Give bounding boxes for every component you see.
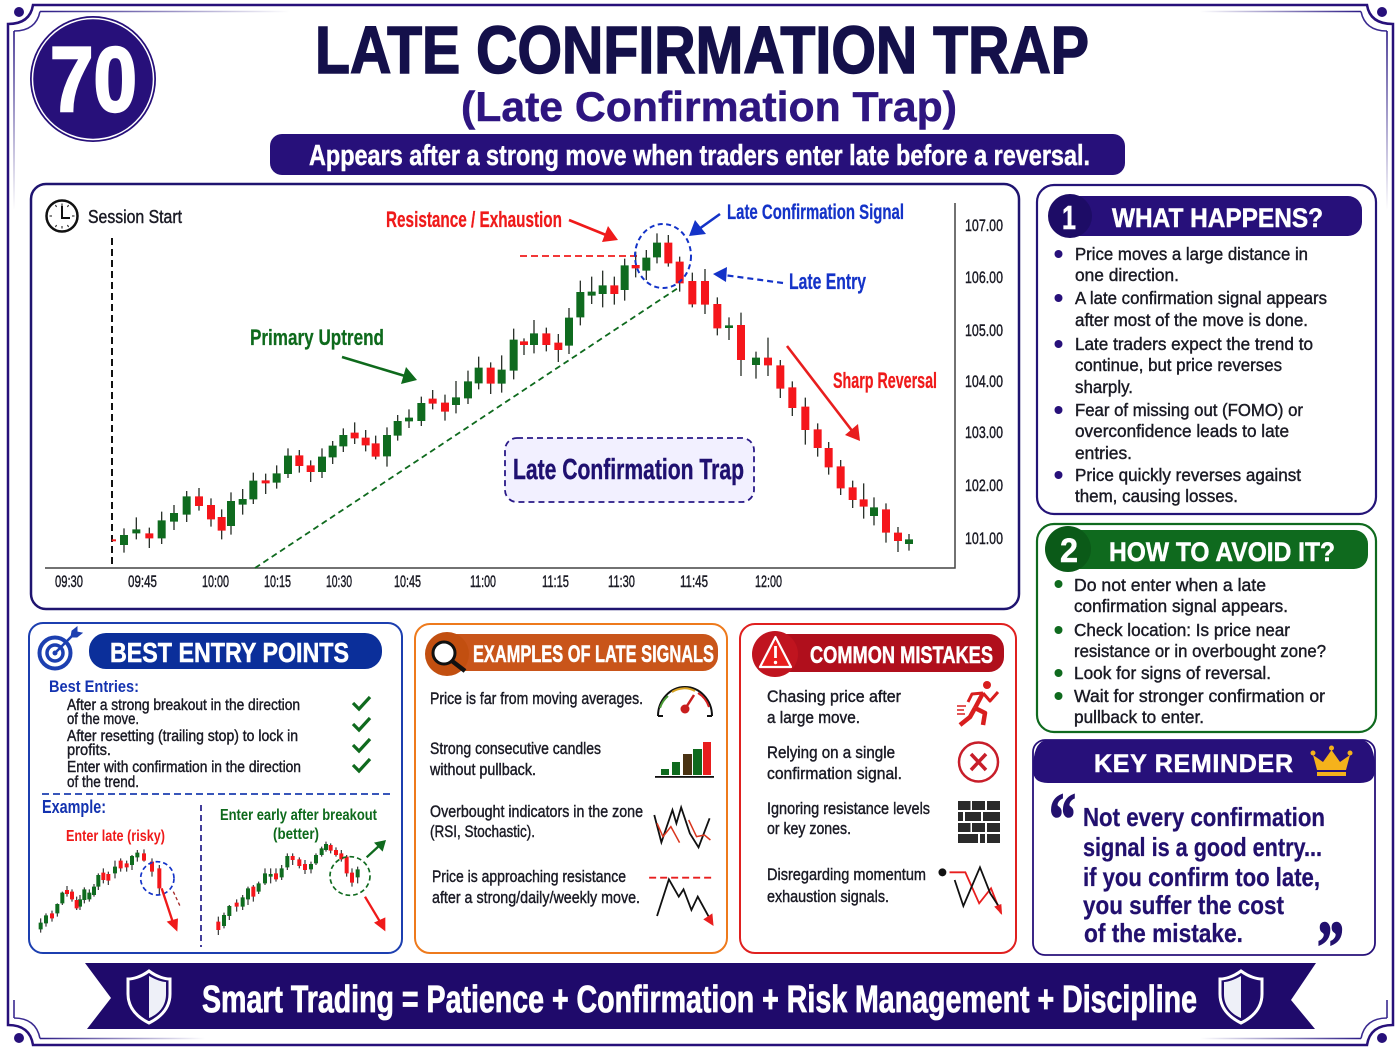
text: momentum exhaustion: [767, 865, 926, 906]
bullets: what happens: one direction.: [1075, 265, 1179, 285]
divider: [42, 793, 390, 795]
bullets: what happens: Price quickly reverses against: [1075, 465, 1301, 485]
bullets: how to avoid it: pullback to enter.: [1074, 707, 1204, 727]
arrow: sharp reversal: [787, 346, 860, 441]
label: sharp reversal: Sharp Reversal: [833, 368, 937, 393]
best entries list: [67, 697, 301, 791]
candles: top and reversal leg: [514, 233, 909, 552]
uptrend support line: [255, 288, 678, 568]
icon: momentum exhaustion chart: [938, 867, 1002, 915]
price axis labels: 103.00: [965, 423, 1003, 442]
price axis labels: 107.00: [965, 216, 1003, 235]
heading: how to avoid it: [1045, 526, 1368, 572]
text: consecutive candles: without pullback.: [429, 760, 536, 779]
time axis labels: 09:45: [128, 573, 157, 591]
price axis labels: 105.00: [965, 321, 1003, 340]
icon: target: [40, 627, 82, 668]
tagline banner: [270, 134, 1125, 175]
text: momentum exhaustion: exhaustion signals.: [767, 887, 889, 906]
candles: rising leg: [112, 355, 502, 553]
reminder quote: Not every confirmation: [1083, 802, 1325, 832]
price axis labels: [965, 216, 1003, 548]
text: overbought indicators: (RSI, Stochastic).: [430, 822, 535, 841]
subheading: best entries: Best Entries:: [49, 677, 139, 696]
panel: main candlestick chart: [31, 184, 1019, 609]
heading: what happens: 1: [1062, 199, 1076, 236]
divider between examples: [200, 805, 202, 947]
heading: how to avoid it: HOW TO AVOID IT?: [1109, 537, 1335, 567]
icon: overbought zigzag: [654, 807, 710, 847]
best entries list: of the move.: [67, 711, 139, 728]
time axis labels: 11:15: [542, 573, 569, 591]
icon: brick wall: [958, 801, 1000, 843]
text: momentum exhaustion: Disregarding momentum: [767, 865, 926, 884]
panel: how to avoid it: [1037, 524, 1376, 732]
panel: key reminder: [1033, 740, 1375, 989]
text: ignoring resistance: [767, 799, 930, 838]
time axis labels: 12:00: [755, 573, 782, 591]
price axis labels: 104.00: [965, 372, 1003, 391]
icon: resistance chart: [649, 878, 714, 926]
icon: left shield: [128, 971, 170, 1023]
text: overbought indicators: [430, 802, 643, 841]
label: resistance exhaustion: Resistance / Exhaustion: [386, 207, 562, 232]
text: single signal: confirmation signal.: [767, 764, 902, 783]
arrow: late confirmation signal: [689, 214, 720, 236]
bullets: what happens: A late confirmation signal appears: [1075, 288, 1327, 308]
best entries list: After resetting (trailing stop) to lock in: [67, 728, 298, 745]
number badge: 70: [50, 29, 137, 131]
heading: what happens: [1048, 194, 1362, 238]
bullets: what happens: sharply.: [1075, 377, 1133, 397]
time axis labels: 09:30: [55, 573, 83, 591]
subheading: example: Example:: [42, 797, 106, 817]
bullets: how to avoid it: Wait for stronger confirmation or: [1074, 686, 1325, 706]
bullets: what happens: [1054, 244, 1327, 506]
panel: what happens: [1037, 185, 1376, 514]
text: approaching resistance: [432, 867, 640, 907]
best entries list: profits.: [67, 742, 111, 759]
panel: best entry points: [29, 623, 402, 953]
mini chart: enter early: [218, 840, 386, 935]
icon: running figure: [957, 681, 998, 725]
subtitle: (Late Confirmation Trap): [461, 83, 957, 130]
arrow: late entry: [713, 267, 783, 283]
text: chasing price: [767, 687, 901, 727]
reminder quote: ”: [1317, 907, 1344, 989]
bottom ribbon: [85, 963, 1316, 1029]
bullets: how to avoid it: Check location: Is price near: [1074, 620, 1290, 640]
text: ignoring resistance: or key zones.: [767, 819, 851, 838]
text: approaching resistance: Price is approaching resistance: [432, 867, 626, 886]
price axis labels: 102.00: [965, 476, 1003, 495]
label: late entry: Late Entry: [789, 269, 867, 294]
text: single signal: [767, 743, 902, 783]
bullets: how to avoid it: confirmation signal appears.: [1074, 596, 1288, 616]
bullets: how to avoid it: [1054, 575, 1326, 727]
session start marker line: [111, 238, 113, 565]
reminder quote: [1049, 779, 1344, 989]
time axis labels: 10:15: [264, 573, 291, 591]
heading: examples of late signals: [425, 632, 718, 676]
icon: clock: [46, 200, 78, 232]
bullets: what happens: them, causing losses.: [1075, 486, 1238, 506]
text: far from averages: Price is far from moving averages.: [430, 689, 643, 708]
reminder quote: signal is a good entry...: [1083, 832, 1322, 862]
icon: check marks: [353, 697, 370, 771]
icon: right shield: [1220, 971, 1262, 1023]
time axis labels: 11:00: [470, 573, 496, 591]
time axis labels: 10:30: [326, 573, 352, 591]
session start label: Session Start: [88, 207, 182, 227]
best entries list: Enter with confirmation in the direction: [67, 759, 301, 776]
bullets: what happens: entries.: [1075, 443, 1132, 463]
icon: gauge: [658, 687, 712, 716]
reminder quote: if you confirm too late,: [1083, 862, 1320, 892]
tagline banner: Appears after a strong move when traders enter late before a reversal.: [309, 140, 1090, 172]
heading: key reminder: [1033, 740, 1375, 783]
heading: how to avoid it: 2: [1060, 532, 1078, 570]
label: primary uptrend: Primary Uptrend: [250, 325, 384, 350]
heading: examples of late signals: EXAMPLES OF LATE SIGNALS: [473, 641, 714, 668]
panel: common mistakes: [740, 624, 1016, 953]
text: overbought indicators: Overbought indicators in the zone: [430, 802, 643, 821]
late confirmation circle: [635, 224, 691, 288]
heading: best entry points: BEST ENTRY POINTS: [110, 637, 349, 668]
callout: late confirmation trap: [505, 438, 754, 502]
callout: late confirmation trap: Late Confirmation Trap: [513, 454, 744, 486]
bullets: how to avoid it: Look for signs of reversal.: [1074, 663, 1271, 683]
bullets: what happens: overconfidence leads to late: [1075, 421, 1289, 441]
label: enter late: Enter late (risky): [66, 828, 165, 845]
text: consecutive candles: Strong consecutive candles: [430, 739, 601, 758]
resistance level line: [520, 255, 637, 257]
label: late confirmation signal: Late Confirmation Signal: [727, 201, 904, 224]
time axis labels: 11:30: [608, 573, 635, 591]
bullets: how to avoid it: resistance or in overbought zone?: [1074, 641, 1326, 661]
price axis labels: 106.00: [965, 268, 1003, 287]
icon: rising bars: [655, 742, 714, 778]
text: approaching resistance: after a strong/daily/weekly move.: [432, 888, 640, 907]
icon: warning triangle: [760, 637, 791, 667]
heading: common mistakes: COMMON MISTAKES: [810, 642, 993, 669]
time axis labels: 11:45: [680, 573, 708, 591]
arrow: resistance: [569, 220, 618, 242]
label: enter early: (better): [273, 826, 319, 843]
label: enter early: [220, 807, 378, 843]
bullets: what happens: after most of the move is done.: [1075, 310, 1308, 330]
bullets: what happens: Late traders expect the trend to: [1075, 334, 1313, 354]
icon: crown: [1310, 746, 1352, 776]
arrow: primary uptrend: [342, 357, 417, 384]
text: ignoring resistance: Ignoring resistance levels: [767, 799, 930, 818]
chart axes: [45, 203, 955, 568]
bullets: what happens: Fear of missing out (FOMO) or: [1075, 400, 1303, 420]
best entries list: of the trend.: [67, 774, 139, 791]
text: single signal: Relying on a single: [767, 743, 895, 762]
text: consecutive candles: [429, 739, 601, 779]
best entries list: After a strong breakout in the direction: [67, 697, 300, 714]
text: chasing price: Chasing price after: [767, 687, 901, 706]
panel: examples of late signals: [415, 624, 727, 953]
heading: key reminder: KEY REMINDER: [1094, 750, 1293, 778]
text: chasing price: a large move.: [767, 708, 860, 727]
title: LATE CONFIRMATION TRAP: [315, 13, 1089, 88]
reminder quote: “: [1049, 779, 1076, 861]
reminder quote: of the mistake.: [1084, 918, 1243, 948]
heading: what happens: WHAT HAPPENS?: [1112, 203, 1323, 233]
mini chart: enter late: [41, 849, 180, 933]
icon: magnifier: [433, 642, 465, 671]
bullets: how to avoid it: Do not enter when a late: [1074, 575, 1266, 595]
label: enter early: Enter early after breakout: [220, 807, 378, 824]
bullets: what happens: Price moves a large distance in: [1075, 244, 1308, 264]
icon: crossed circle: [959, 742, 998, 782]
time axis labels: [55, 573, 782, 591]
time axis labels: 10:45: [394, 573, 421, 591]
price axis labels: 101.00: [965, 529, 1003, 548]
bullets: what happens: continue, but price reverses: [1075, 355, 1282, 375]
heading: common mistakes: [752, 631, 1004, 677]
reminder quote: you suffer the cost: [1083, 890, 1284, 920]
number badge: [30, 16, 156, 142]
time axis labels: 10:00: [202, 573, 229, 591]
